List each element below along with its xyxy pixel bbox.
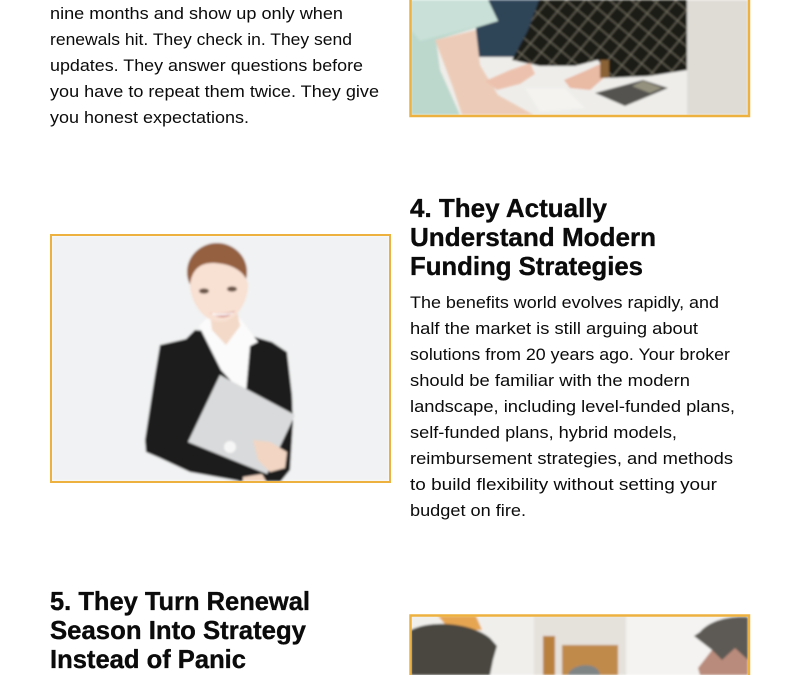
- photo border: [410, 616, 749, 675]
- text block: reason 4 body: [410, 293, 735, 520]
- text block: reason 3 body continuation: [50, 4, 379, 127]
- hair: [186, 242, 248, 285]
- text block: reason 3 body continuation: updates. They answer questions before: [50, 56, 363, 75]
- text block: reason 4 body: solutions from 20 years ago. Your broker: [410, 345, 730, 364]
- heading: reason 4: Understand Modern: [410, 222, 656, 252]
- heading: reason 4: 4. They Actually: [410, 193, 608, 223]
- photo: businesswoman holding laptop: [51, 235, 390, 482]
- laptop: [188, 375, 295, 474]
- heading: reason 4: [410, 193, 656, 281]
- jacket: [145, 330, 293, 481]
- blouse: [512, 0, 687, 78]
- neck: [210, 313, 240, 345]
- text block: reason 4 body: landscape, including level-funded plans,: [410, 397, 735, 416]
- orange shape behind left head: [438, 616, 482, 630]
- photo border: [51, 235, 390, 482]
- doors: [543, 636, 555, 675]
- forearm: [435, 30, 534, 115]
- right person: [694, 616, 748, 662]
- heading: reason 5: 5. They Turn Renewal: [50, 586, 310, 616]
- heading: reason 5: Season Into Strategy: [50, 615, 307, 645]
- face: [190, 263, 248, 322]
- text block: reason 3 body continuation: you honest expectations.: [50, 108, 249, 127]
- paper: [525, 88, 585, 112]
- mint top: [412, 22, 496, 115]
- text block: reason 3 body continuation: you have to repeat them twice. They give: [50, 82, 379, 101]
- text block: reason 4 body: reimbursement strategies, and methods: [410, 449, 733, 468]
- photo border: [410, 0, 749, 116]
- text block: reason 4 body: self-funded plans, hybrid models,: [410, 423, 677, 442]
- calculator: [595, 80, 668, 106]
- heading: reason 4: Funding Strategies: [410, 251, 643, 281]
- heading: reason 5: [50, 586, 310, 674]
- hands: [485, 63, 535, 90]
- text block: reason 4 body: should be familiar with the modern: [410, 371, 690, 390]
- text block: reason 3 body continuation: nine months and show up only when: [50, 4, 343, 23]
- text block: reason 3 body continuation: renewals hit. They check in. They send: [50, 30, 352, 49]
- text block: reason 4 body: half the market is still arguing about: [410, 319, 698, 338]
- centre person hair: [568, 665, 600, 675]
- shirt: [199, 318, 258, 392]
- eyes and mouth: [199, 288, 209, 294]
- heading: reason 5: Instead of Panic: [50, 644, 246, 674]
- photo: two people at desk with calculator: [410, 0, 749, 116]
- text block: reason 4 body: The benefits world evolves rapidly, and: [410, 293, 719, 312]
- left head hair: [411, 624, 497, 675]
- text block: reason 4 body: to build flexibility without setting your: [410, 475, 717, 494]
- photo: meeting in an office: [410, 616, 749, 675]
- hand: [253, 440, 287, 472]
- text block: reason 4 body: budget on fire.: [410, 501, 526, 520]
